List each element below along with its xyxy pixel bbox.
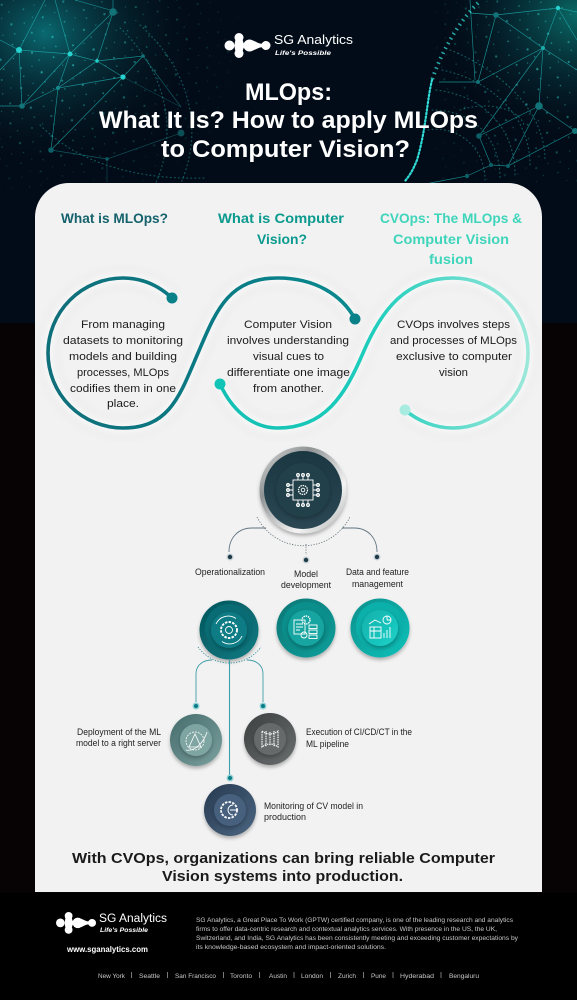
text: MLOps description: models and building <box>69 351 177 363</box>
title: What It Is? How to apply MLOps <box>99 107 478 134</box>
closing statement: With CVOps, organizations can bring reliable Computer <box>72 851 495 867</box>
label: Deployment: Deployment of the ML <box>77 727 161 737</box>
heading: CVOps: fusion <box>429 251 473 267</box>
icon: Operationalization gear circle <box>200 600 258 660</box>
icon: Deployment circle <box>170 714 222 766</box>
footer website: www.sganalytics.com <box>66 944 148 954</box>
label: Data and feature management: management <box>352 579 403 589</box>
header logo <box>224 33 353 58</box>
label: Deployment: model to a right server <box>76 738 161 748</box>
footer city list: Seattle <box>139 973 160 980</box>
text: MLOps description: processes, MLOps <box>77 367 170 379</box>
footer city list: London <box>301 973 323 980</box>
icon: central chip circle <box>260 446 346 534</box>
text: CVOps description: CVOps involves steps <box>397 319 511 331</box>
footer city list: Bengaluru <box>449 973 479 980</box>
text: CVOps description: and processes of MLOps <box>390 335 518 347</box>
footer city list: New York <box>98 973 126 980</box>
heading: What is Computer Vision: What is Computer <box>218 210 345 226</box>
footer company description: Switzerland, and India, SG Analytics has been consistently meeting and exceeding customer expectations by <box>196 935 519 942</box>
label: Monitoring <box>264 801 363 822</box>
label: Monitoring: production <box>264 812 306 822</box>
label: Monitoring: Monitoring of CV model in <box>264 801 363 811</box>
text: Computer Vision description: from another. <box>253 383 324 395</box>
text: CVOps description: vision <box>439 367 468 379</box>
header logo: SG Analytics <box>274 33 353 47</box>
connectors from central circle <box>226 517 380 564</box>
text: Computer Vision description <box>227 319 350 395</box>
icon: Monitoring circle <box>204 784 256 836</box>
title <box>99 79 478 163</box>
connectors from Operationalization <box>192 647 266 782</box>
label: Model development <box>281 569 331 590</box>
footer city list: Toronto <box>230 973 252 980</box>
footer city list: Zurich <box>338 973 356 980</box>
label: Model development: Model <box>294 569 318 579</box>
text: Computer Vision description: involves understanding <box>227 335 349 347</box>
footer city list: San Francisco <box>175 973 216 980</box>
S-curve halo <box>48 278 528 428</box>
heading: CVOps <box>380 210 522 267</box>
heading: What is Computer Vision: Vision? <box>257 231 307 247</box>
footer logo: SG Analytics <box>99 913 167 925</box>
main card panel <box>35 183 542 892</box>
label: Execution: ML pipeline <box>306 739 349 749</box>
footer city list: Hyderabad <box>400 973 434 980</box>
heading: What is MLOps: What is MLOps? <box>61 210 168 226</box>
footer company description: firms to offer data-centric research and contextual analytics services. With presence in the US, the UK, <box>196 926 497 933</box>
footer logo: Life's Possible <box>100 928 149 934</box>
label: Model development: development <box>281 580 331 590</box>
text: CVOps description <box>390 319 518 379</box>
footer logo <box>56 912 167 934</box>
footer company description: SG Analytics, a Great Place To Work (GPTW) certified company, is one of the leading research and analytics <box>196 917 513 924</box>
closing statement <box>72 851 495 885</box>
label: Execution: Execution of CI/CD/CT in the <box>306 727 412 737</box>
icon: Data and feature circle <box>350 598 410 658</box>
heading: CVOps: CVOps: The MLOps & <box>380 210 522 226</box>
title: to Computer Vision? <box>161 136 410 163</box>
curve: Computer Vision and CVOps loop <box>214 278 528 428</box>
text: MLOps description <box>63 319 183 410</box>
curve: MLOps and Computer Vision loop <box>48 278 360 428</box>
text: MLOps description: place. <box>107 398 139 410</box>
footer city list <box>98 972 479 980</box>
text: CVOps description: exclusive to computer <box>396 351 512 363</box>
heading: What is Computer Vision <box>218 210 345 247</box>
text: Computer Vision description: Computer Vision <box>244 319 332 331</box>
footer company description: its knowledge-based ecosystem and impact-oriented solutions. <box>196 944 386 951</box>
closing statement: Vision systems into production. <box>162 869 403 885</box>
text: Computer Vision description: differentiate one image <box>227 367 350 379</box>
title: MLOps: <box>245 79 332 106</box>
footer company description <box>196 917 519 951</box>
label: Execution <box>306 727 412 749</box>
heading: CVOps: Computer Vision <box>393 231 509 247</box>
header logo: Life's Possible <box>275 50 331 57</box>
label: Operationalization: Operationalization <box>195 567 265 577</box>
text: MLOps description: codifies them in one <box>70 383 176 395</box>
footer city list: Austin <box>269 973 287 980</box>
label: Deployment <box>76 727 161 748</box>
text: MLOps description: datasets to monitoring <box>63 335 183 347</box>
label: Data and feature management: Data and feature <box>346 567 409 577</box>
text: Computer Vision description: visual cues to <box>253 351 324 363</box>
text: MLOps description: From managing <box>81 319 165 331</box>
icon: Model development circle <box>276 598 336 658</box>
label: Data and feature management <box>346 567 409 589</box>
icon: Execution circle <box>244 713 296 765</box>
footer city list: Pune <box>371 973 386 980</box>
